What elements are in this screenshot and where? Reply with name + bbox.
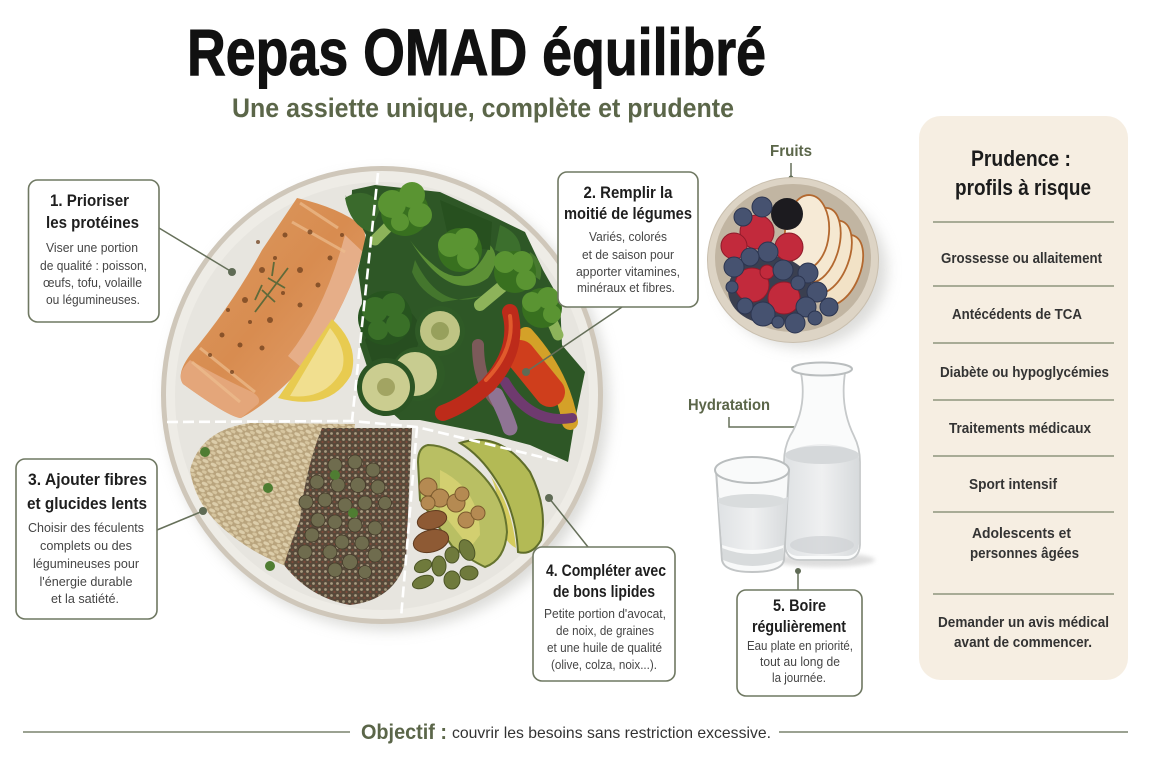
icon: grilled peppers and onion [443, 312, 572, 428]
food: avocado, nuts and seeds [411, 440, 543, 591]
footer objective: Objectif : [361, 721, 447, 744]
risk profile list: Diabète ou hypoglycémies [940, 365, 1109, 381]
card 2: vegetables: 2. Remplir la [584, 184, 673, 202]
risk profile list: personnes âgées [970, 546, 1079, 562]
card 1: proteins: Viser une portion [46, 241, 138, 255]
plate with food [161, 166, 609, 630]
card 3: fibres and slow carbs: et la satiété. [51, 592, 119, 606]
panel heading: profils à risque [955, 175, 1091, 200]
card 5: drink regularly: Eau plate en priorité, [747, 639, 853, 653]
card 1: proteins: ou légumineuses. [46, 293, 140, 307]
card 4: good fats: de noix, de graines [556, 624, 654, 638]
card 4: good fats: 4. Compléter avec [546, 562, 666, 580]
card 2: vegetables: et de saison pour [582, 248, 674, 262]
card 2: vegetables: minéraux et fibres. [577, 281, 675, 295]
card 3: fibres and slow carbs: et glucides lents [27, 495, 147, 513]
risk profile list [940, 251, 1109, 562]
card 4: good fats [533, 494, 675, 681]
card 2: vegetables: Variés, colorés [589, 230, 667, 244]
card 4: good fats: Petite portion d'avocat, [544, 607, 666, 621]
card 4: good fats: de bons lipides [553, 583, 655, 601]
panel: profiles at risk [919, 116, 1128, 680]
fruits label [770, 143, 812, 180]
card 5: drink regularly: la journée. [772, 671, 826, 685]
card 3: fibres and slow carbs: 3. Ajouter fibres [28, 471, 147, 489]
icon: broccoli [358, 182, 562, 345]
card 3: fibres and slow carbs [16, 459, 207, 619]
card 4: good fats: (olive, colza, noix...). [551, 658, 657, 672]
panel heading [955, 146, 1091, 200]
footer objective: couvrir les besoins sans restriction excessive. [452, 725, 771, 742]
card 5: drink regularly: 5. Boire [773, 597, 826, 615]
risk profile list: Traitements médicaux [949, 421, 1091, 437]
fruits label: Fruits [770, 143, 812, 160]
card 2: vegetables: moitié de légumes [564, 205, 692, 223]
icon: carafe and glass of water [715, 362, 875, 572]
card 4: good fats: et une huile de qualité [547, 641, 662, 655]
card 5: drink regularly: régulièrement [752, 618, 846, 636]
medical advice note: Demander un avis médical [938, 615, 1109, 631]
risk profile list: Grossesse ou allaitement [941, 251, 1102, 267]
card 1: proteins: 1. Prioriser [50, 192, 130, 210]
icon: fruit bowl [708, 178, 887, 348]
panel heading: Prudence : [971, 146, 1071, 171]
subtitle: Une assiette unique, complète et prudente [232, 93, 734, 123]
title: Repas OMAD équilibré [187, 15, 766, 89]
card 2: vegetables: apporter vitamines, [576, 265, 680, 279]
card 1: proteins: les protéines [46, 214, 139, 232]
card 1: proteins: de qualité : poisson, [40, 259, 147, 273]
hydration label: Hydratation [688, 397, 770, 414]
card 1: proteins [28, 180, 236, 322]
risk profile list: Antécédents de TCA [952, 307, 1082, 323]
card 3: fibres and slow carbs: l'énergie durable [40, 575, 133, 589]
food: green vegetables [345, 182, 585, 462]
plate dividers [167, 173, 562, 618]
card 2: vegetables [522, 172, 698, 376]
food: salmon and lemon [181, 198, 365, 418]
icon: zucchini slices [357, 306, 465, 416]
hydration label [688, 397, 801, 430]
risk profile list: Sport intensif [969, 477, 1057, 493]
medical advice note [938, 615, 1109, 651]
card 3: fibres and slow carbs: Choisir des féculents [28, 521, 144, 535]
card 3: fibres and slow carbs: complets ou des [40, 539, 132, 553]
card 5: drink regularly: tout au long de [760, 655, 840, 669]
card 1: proteins: œufs, tofu, volaille [43, 276, 142, 290]
medical advice note: avant de commencer. [954, 635, 1092, 651]
food: rice and lentils [190, 423, 412, 605]
card 5: drink regularly [737, 568, 862, 696]
footer objective [23, 721, 1128, 744]
risk profile list: Adolescents et [972, 526, 1071, 542]
card 3: fibres and slow carbs: légumineuses pour [33, 557, 139, 571]
